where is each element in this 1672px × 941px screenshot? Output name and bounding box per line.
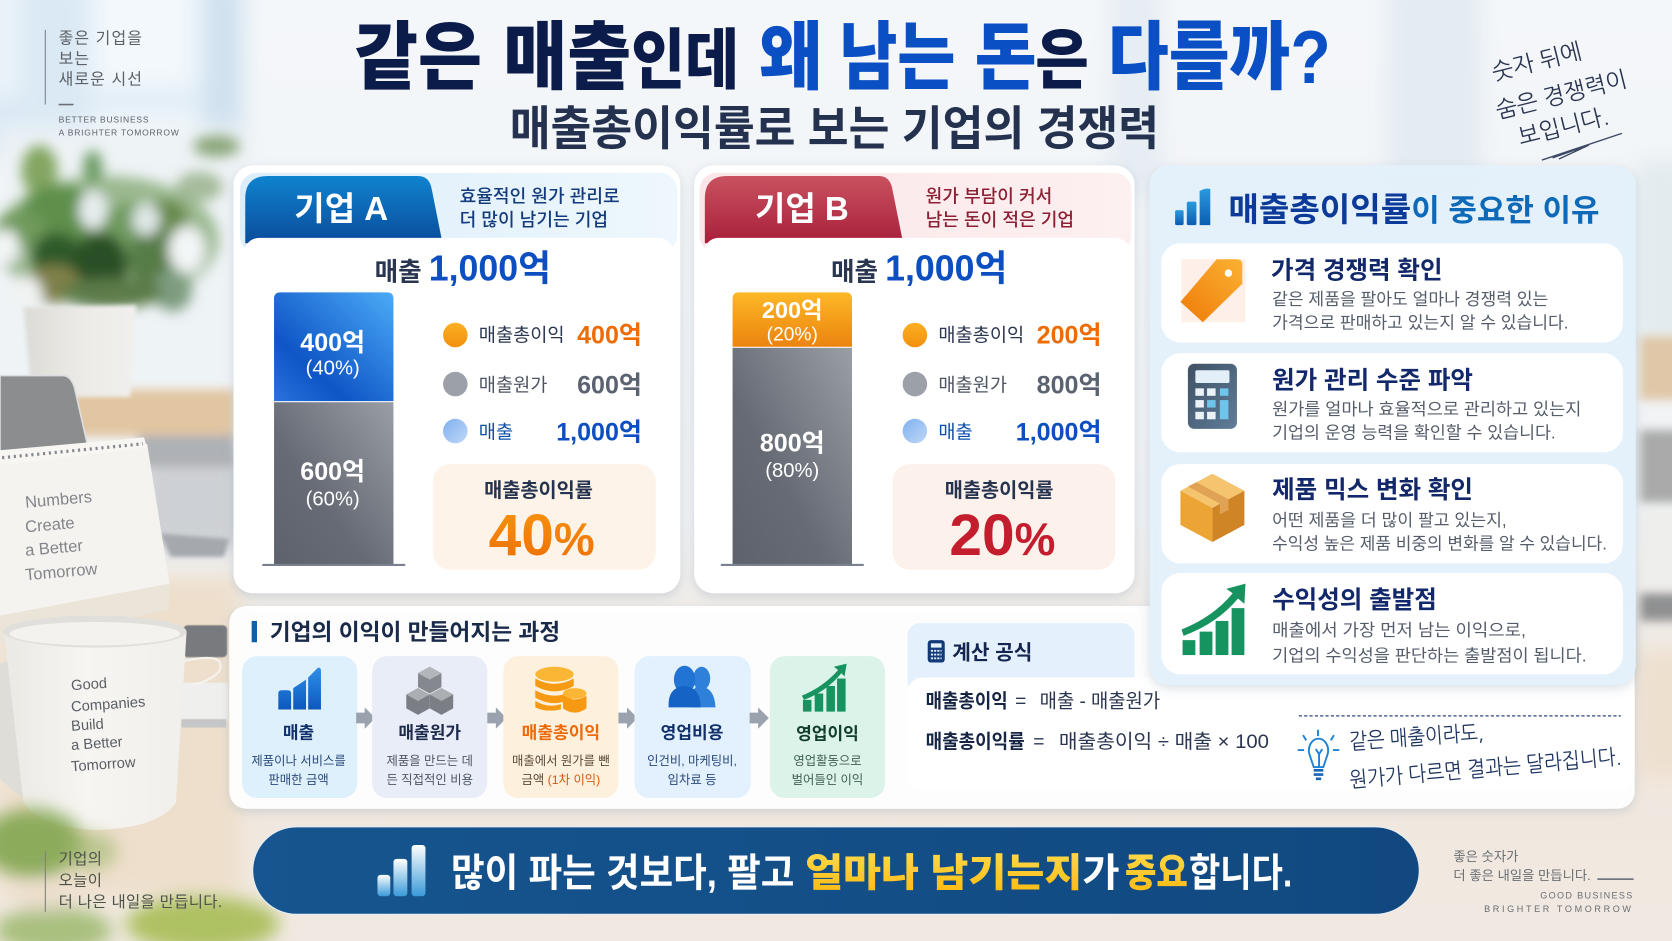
stacked bar B: (20%) [767, 324, 818, 345]
desk calendar: Create [24, 513, 75, 536]
bottom-right note: BRIGHTER TOMORROW [1484, 904, 1634, 914]
company B description: 원가 부담이 커서 [926, 187, 1052, 207]
panel: company B [694, 165, 1135, 593]
banner message: 중요 [1125, 852, 1188, 896]
card: cost management: 원가를 얼마나 효율적으로 관리하고 있는지 [1272, 399, 1581, 419]
company A tab: 기업 A [294, 191, 388, 228]
step: cost of goods: 제품을 만드는 데 [387, 754, 473, 768]
right panel heading: 매출총이익률이 중요한 이유 [1228, 192, 1599, 229]
icon: light bulb [1298, 730, 1339, 779]
card: cost management: 원가 관리 수준 파악 [1272, 366, 1473, 394]
stacked bar B: 800억 [760, 429, 825, 457]
card: cost management [1161, 353, 1623, 452]
bottom-right note [1453, 849, 1634, 914]
icon: banner bars [377, 845, 425, 896]
window mullion shade [69, 336, 1672, 621]
step: gross profit: 금액 (1차 이익) [521, 773, 600, 787]
blurred pot [23, 305, 136, 397]
mug: Companies [71, 694, 146, 716]
margin box A: 매출총이익률 [484, 480, 593, 502]
card: product mix: 수익성 높은 제품 비중의 변화를 알 수 있습니다. [1272, 533, 1607, 553]
foreground plant [0, 809, 279, 941]
top-left note: 보는 [59, 50, 90, 68]
step: cost of goods: 든 직접적인 비용 [387, 773, 473, 787]
legend B: 매출원가 [938, 375, 1007, 396]
margin box B: 20% [949, 503, 1055, 568]
card: product mix [1161, 464, 1623, 563]
panel: profit process and formula [229, 606, 1635, 809]
arrow [487, 707, 507, 729]
icon: bars heading [1175, 189, 1210, 225]
revenue heading B: 매출 1,000억 [831, 249, 1007, 289]
legend B: 매출 [938, 421, 973, 442]
card: profitability: 기업의 수익성을 판단하는 출발점이 됩니다. [1272, 645, 1587, 665]
stacked bar A [262, 292, 405, 565]
legend A [443, 322, 642, 447]
card: profitability [1161, 573, 1623, 674]
bottom-left note: 더 나은 내일을 만듭니다. [59, 893, 222, 911]
legend A: 매출원가 [479, 375, 547, 396]
handwritten note top right [1490, 40, 1629, 160]
top-left note: A BRIGHTER TOMORROW [59, 127, 180, 137]
stacked bar B: (80%) [765, 460, 819, 482]
legend A: 매출총이익 [479, 324, 565, 345]
margin box A: 40% [489, 503, 595, 568]
stacked bar A: (40%) [306, 357, 360, 379]
mug: Tomorrow [71, 755, 136, 775]
blurred plant [0, 135, 240, 312]
step: operating profit: 영업이익 [796, 724, 859, 743]
top-left note: 새로운 시선 [59, 70, 143, 88]
stacked bar B: 200억 [762, 297, 823, 323]
step: revenue: 제품이나 서비스를 [251, 754, 346, 768]
company B description: 남는 돈이 적은 기업 [926, 210, 1074, 230]
banner [253, 827, 1419, 914]
legend B: 1,000억 [1016, 419, 1102, 447]
card: price: 같은 제품을 팔아도 얼마나 경쟁력 있는 [1272, 289, 1548, 309]
handwritten takeaway [1348, 722, 1622, 791]
formula lines: = [1033, 732, 1044, 753]
formula lines: 매출총이익률 [926, 731, 1025, 753]
step: operating cost: 임차료 등 [668, 773, 717, 787]
title [354, 15, 1331, 99]
desk calendar: Numbers [24, 487, 93, 512]
mug [0, 616, 187, 830]
stacked bar A: 400억 [300, 329, 365, 357]
mug: Build [71, 717, 104, 735]
step: gross profit: 매출에서 원가를 뺀 [512, 754, 610, 768]
stacked bar A: 600억 [300, 458, 365, 486]
card: price [1161, 243, 1623, 342]
top-left note [45, 30, 180, 137]
bottom-right note: 더 좋은 내일을 만듭니다. [1453, 868, 1591, 883]
formula lines: = [1015, 691, 1026, 712]
legend A: 1,000억 [556, 419, 642, 447]
bottom-left note: 기업의 [59, 850, 102, 868]
title: 같은 [354, 15, 482, 99]
bottom-right note: GOOD BUSINESS [1540, 890, 1634, 900]
step: operating cost [634, 656, 751, 798]
title: 왜 [759, 15, 822, 99]
title: 다를까? [1108, 15, 1331, 99]
step: gross profit [503, 656, 618, 798]
formula panel [907, 623, 1635, 791]
stacked bar A: (60%) [306, 489, 360, 511]
desk calendar [0, 437, 170, 642]
subtitle: 매출총이익률로 보는 기업의 경쟁력 [510, 103, 1159, 155]
step: operating cost: 영업비용 [661, 723, 723, 742]
banner message: 얼마나 남기는지 [805, 852, 1082, 896]
desk calendar: Tomorrow [24, 559, 98, 584]
process heading: 기업의 이익이 만들어지는 과정 [270, 619, 560, 645]
card: product mix: 제품 믹스 변화 확인 [1272, 476, 1473, 504]
step: revenue [242, 656, 357, 798]
step: cost of goods [372, 656, 487, 798]
handwritten note top right: 숨은 경쟁력이 [1493, 67, 1629, 122]
card: price: 가격으로 판매하고 있는지 알 수 있습니다. [1272, 313, 1569, 333]
step: revenue: 판매한 금액 [268, 773, 329, 787]
banner message: 많이 파는 것보다, 팔고 [451, 852, 794, 896]
card: cost management: 기업의 운영 능력을 확인할 수 있습니다. [1272, 422, 1556, 442]
legend A: 600억 [577, 372, 642, 400]
title: 은 [1035, 24, 1089, 98]
step: revenue: 매출 [283, 723, 314, 742]
card: price: 가격 경쟁력 확인 [1271, 256, 1443, 284]
stacked bar B [721, 292, 864, 565]
legend B: 200억 [1037, 322, 1102, 350]
banner message [451, 852, 1292, 896]
title: 돈 [975, 15, 1036, 99]
margin box B [893, 464, 1115, 570]
bottom-right note: 좋은 숫자가 [1453, 849, 1518, 864]
formula lines [926, 690, 1269, 753]
panel: why gross margin matters [1150, 165, 1636, 685]
legend B: 800억 [1037, 372, 1102, 400]
margin box B: 매출총이익률 [945, 480, 1054, 502]
step: gross profit: 매출총이익 [522, 723, 600, 742]
company A tab [245, 176, 443, 243]
step: operating profit: 벌어들인 이익 [792, 773, 863, 787]
card: product mix: 어떤 제품을 더 많이 팔고 있는지, [1272, 510, 1507, 530]
margin box A [433, 464, 656, 570]
banner message: 합니다. [1189, 852, 1292, 896]
company A description: 더 많이 남기는 기업 [460, 210, 608, 230]
legend A: 매출 [479, 421, 513, 442]
formula panel: 계산 공식 [952, 641, 1032, 664]
arrow [618, 707, 638, 729]
handwritten takeaway: 같은 매출이라도, [1349, 722, 1484, 753]
formula lines: 매출 - 매출원가 [1040, 690, 1161, 712]
company B tab [705, 176, 903, 243]
card: profitability: 수익성의 출발점 [1272, 586, 1437, 614]
top-left note: 좋은 기업을 [59, 30, 143, 48]
icon: calculator small [928, 640, 945, 663]
step: operating profit [770, 656, 885, 798]
banner message: 가 [1082, 852, 1120, 896]
title: 남는 [839, 15, 955, 99]
title: 인데 [631, 24, 739, 98]
card: profitability: 매출에서 가장 먼저 남는 이익으로, [1272, 620, 1526, 640]
title: 매출 [503, 15, 631, 99]
legend B [903, 322, 1102, 447]
bottom-left note: 오늘이 [59, 872, 102, 890]
top-left note: BETTER BUSINESS [59, 115, 149, 125]
formula lines: 매출총이익 [926, 690, 1008, 712]
step: cost of goods: 매출원가 [398, 723, 461, 742]
revenue heading A: 매출 1,000억 [375, 249, 551, 289]
company B description [926, 187, 1074, 230]
legend B: 매출총이익 [938, 324, 1024, 345]
handwritten note top right: 보입니다. [1516, 105, 1611, 149]
legend A: 400억 [577, 322, 642, 350]
arrow [750, 707, 769, 729]
handwritten takeaway: 원가가 다르면 결과는 달라집니다. [1348, 746, 1622, 791]
mug: Good [71, 676, 108, 694]
company A description [460, 187, 620, 230]
step: operating cost: 인건비, 마케팅비, [647, 754, 737, 768]
formula lines: 매출총이익 ÷ 매출 × 100 [1059, 731, 1269, 753]
desk calendar: a Better [24, 536, 84, 560]
mug: a Better [71, 734, 123, 754]
gadgets behind mug [0, 376, 229, 728]
company B tab: 기업 B [755, 191, 849, 228]
handwritten note top right: 숫자 뒤에 [1490, 40, 1584, 84]
step: operating profit: 영업활동으로 [793, 754, 862, 768]
bottom-left note [45, 850, 222, 912]
arrow [356, 707, 375, 729]
panel: company A [234, 165, 680, 593]
company A description: 효율적인 원가 관리로 [460, 187, 620, 207]
